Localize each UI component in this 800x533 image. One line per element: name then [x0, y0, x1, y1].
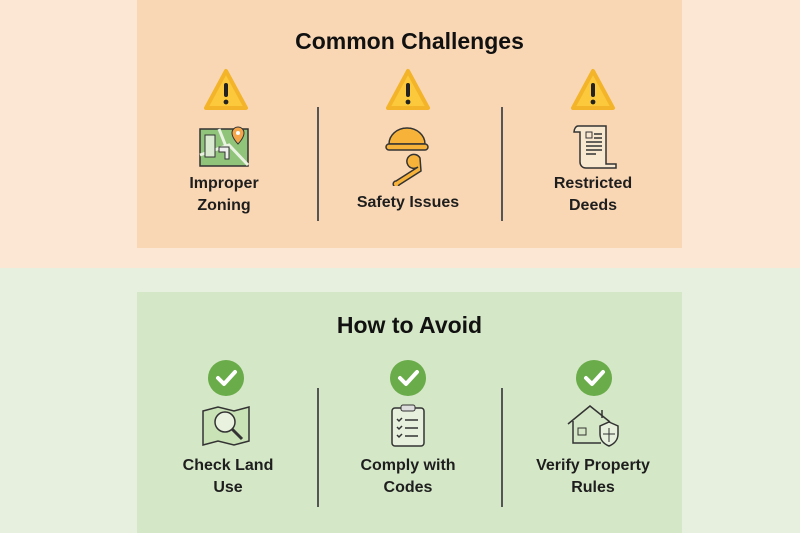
text: verify property rules [536, 457, 650, 496]
heading: common challenges: Common Challenges [295, 28, 524, 54]
text: restricted deeds [554, 175, 632, 214]
text: improper zoning: Zoning [197, 197, 251, 214]
icon: warning 2 [386, 68, 430, 110]
icon: house with shield [568, 405, 619, 447]
heading: how to avoid: How to Avoid [337, 312, 482, 338]
icon: warning 1 [204, 68, 248, 110]
icon: check 3 [576, 360, 612, 396]
icon: warning 3 [571, 68, 616, 110]
icon: zoning map [199, 126, 249, 167]
text: restricted deeds: Restricted [554, 175, 632, 192]
text: restricted deeds: Deeds [569, 197, 617, 214]
text: improper zoning: Improper [189, 175, 259, 192]
panel: how to avoid [137, 292, 682, 533]
icon: clipboard [391, 404, 425, 447]
icon: check 1 [208, 360, 244, 396]
icon: check 2 [390, 360, 426, 396]
text: comply with codes: Codes [384, 479, 432, 496]
icon: map with magnifier [202, 406, 250, 446]
text: check land use: Use [213, 479, 243, 496]
text: safety issues: Safety Issues [357, 194, 459, 211]
text: improper zoning [189, 175, 259, 214]
text: comply with codes [360, 457, 456, 496]
text: check land use: Check Land [183, 457, 273, 474]
background top band [0, 0, 800, 268]
text: verify property rules: Rules [571, 479, 615, 496]
text: check land use [183, 457, 273, 496]
panel: common challenges [137, 0, 682, 248]
text: comply with codes: Comply with [360, 457, 456, 474]
icon: deed scroll [573, 125, 617, 169]
text: verify property rules: Verify Property [536, 457, 650, 474]
icon: hard hat and wrench [385, 127, 429, 186]
